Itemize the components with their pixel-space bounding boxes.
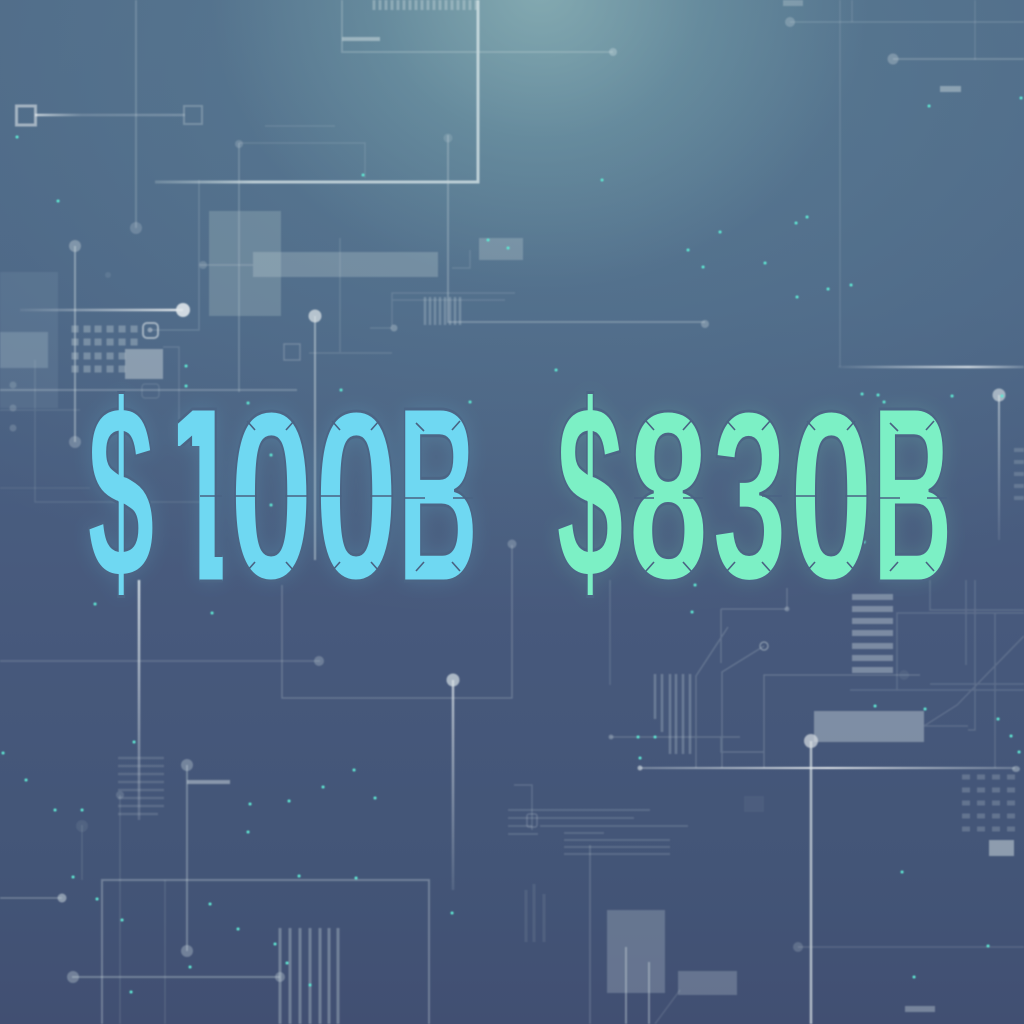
panel: lower left blocks	[0, 758, 429, 1024]
number glow: blue: 0	[314, 363, 399, 631]
panel: top right connectors	[783, 0, 1024, 540]
number glow: green: B	[872, 356, 953, 636]
panel: centre connectors	[284, 134, 709, 560]
figure: $830B: 8	[628, 363, 709, 631]
figure: $830B: 3	[712, 363, 787, 631]
panel: top left connectors	[16, 0, 365, 278]
figure: $830B: 0	[789, 363, 874, 631]
panel: left chip cluster	[0, 240, 297, 502]
figure: $100B: B	[397, 356, 479, 636]
panel: lower right circuit	[608, 580, 1024, 1024]
panel: lower middle blocks	[508, 785, 764, 1024]
number glow: blue	[89, 404, 475, 584]
number glow: blue: B	[397, 356, 479, 636]
figure: $100B	[90, 391, 473, 598]
figure: $100B: 0	[314, 363, 399, 631]
figure: $830B: B	[872, 356, 953, 636]
figure: $100B: 1	[149, 356, 249, 636]
number glow: green: 0	[789, 363, 874, 631]
number glow: green: $	[556, 353, 624, 633]
panel: top centre circuit	[155, 0, 617, 182]
panel: lower centre connectors	[0, 540, 610, 890]
number glow: blue: 0	[229, 363, 314, 631]
number glow: blue: $	[87, 353, 155, 633]
figure: $100B: 0	[229, 363, 314, 631]
figure: $830B: $	[556, 353, 624, 633]
number glow: green: 3	[712, 363, 787, 631]
number glow: blue: 1	[149, 356, 249, 636]
number glow: green: 8	[628, 363, 709, 631]
figure: $100B: $	[87, 353, 155, 633]
panel: translucent blocks	[150, 143, 438, 392]
